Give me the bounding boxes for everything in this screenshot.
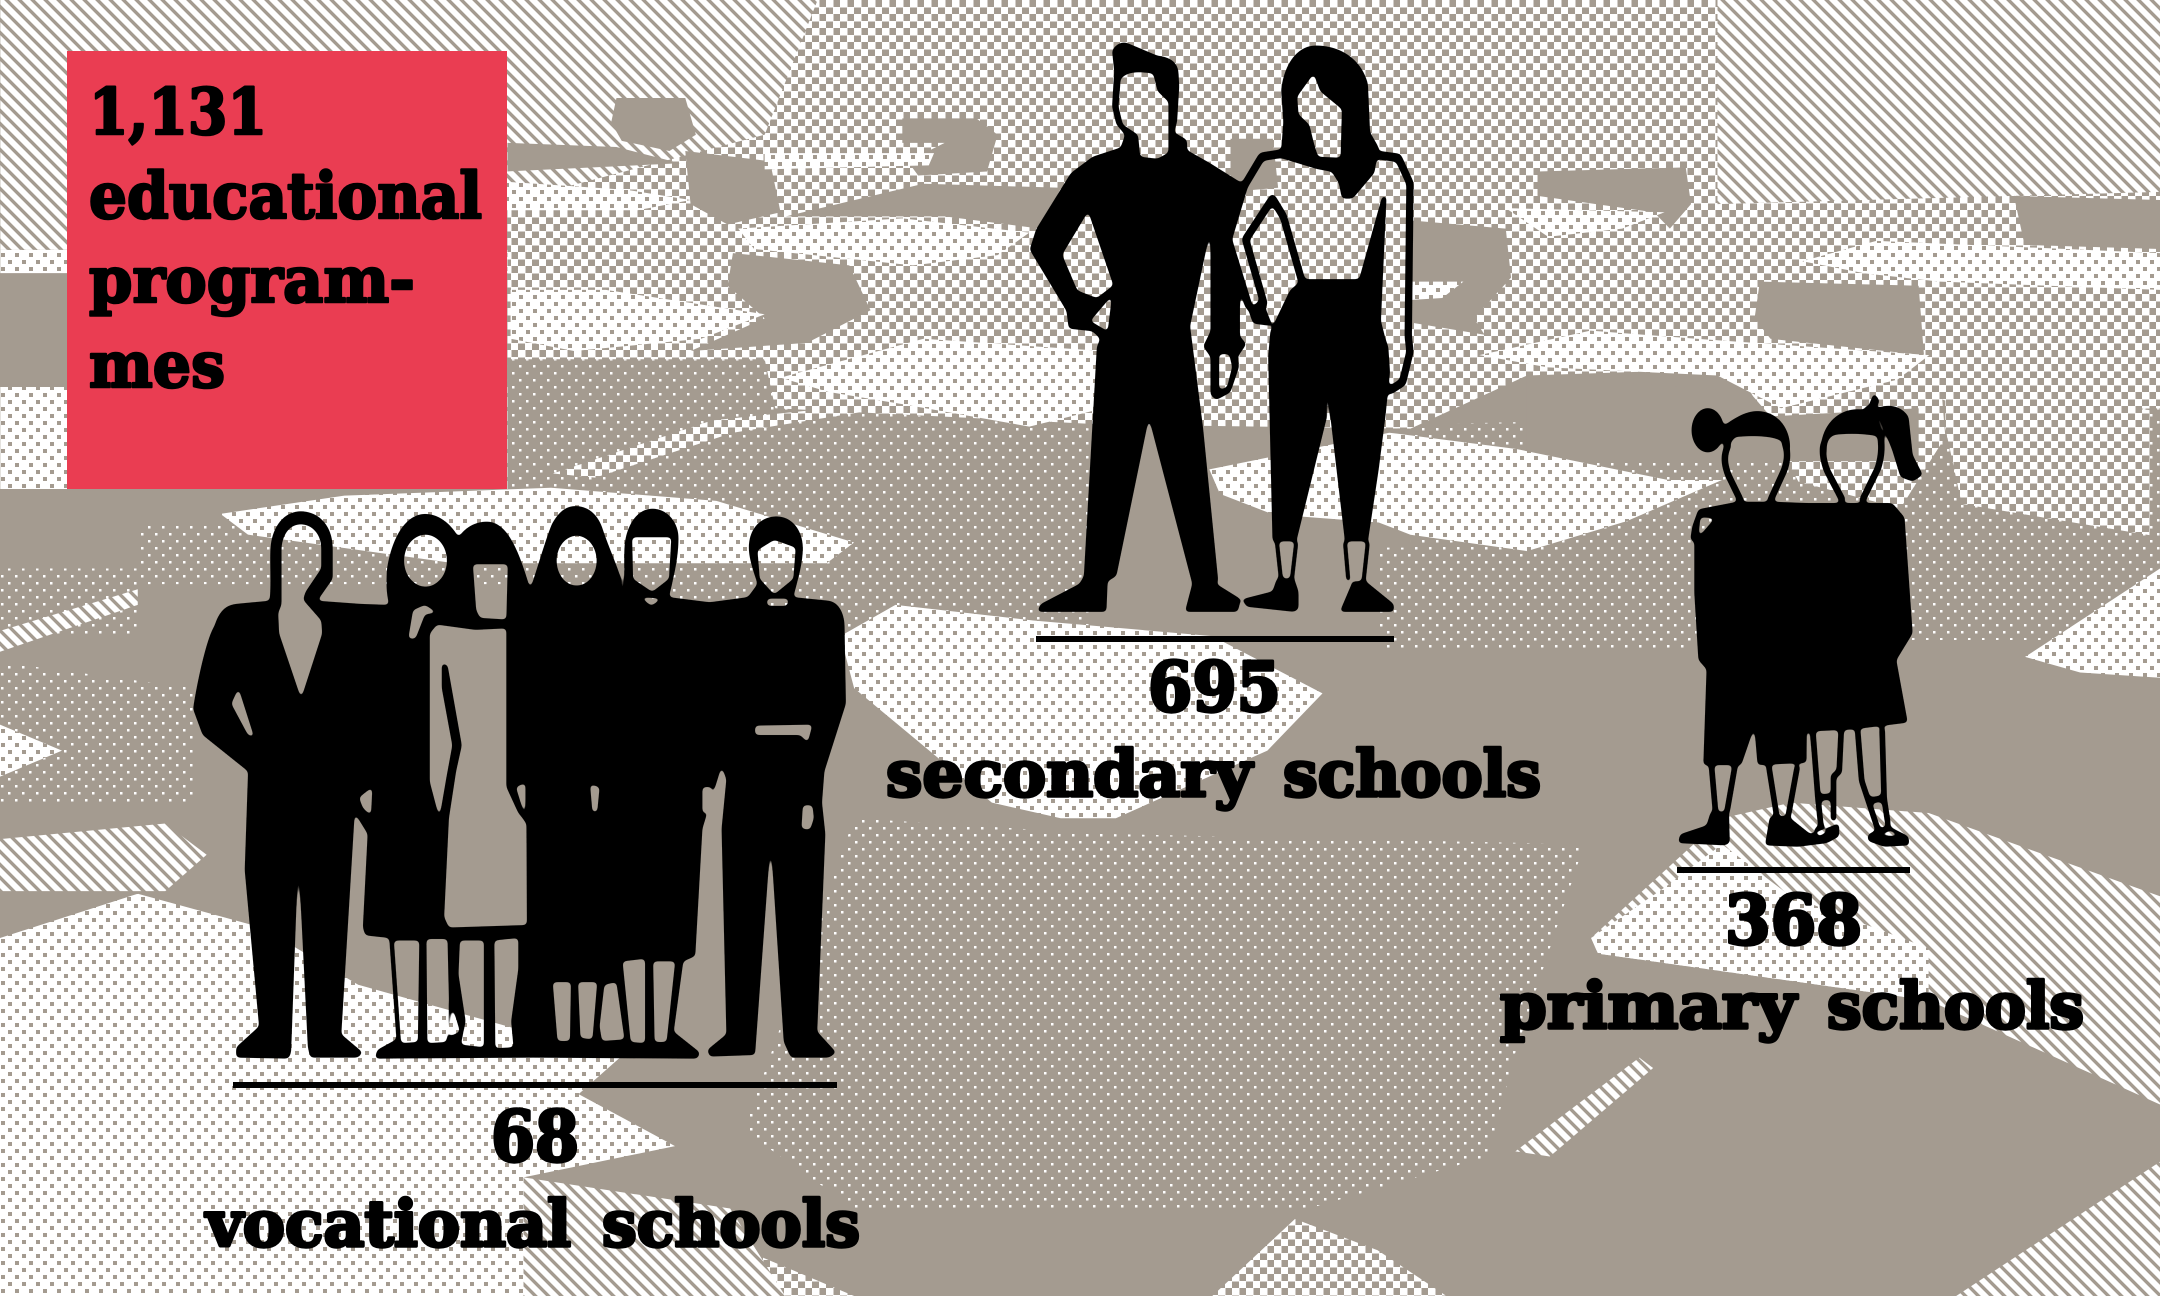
children legs and shoes <box>1678 727 1909 847</box>
child one head <box>1691 408 1790 502</box>
label: 695 secondary schools: 695 <box>1148 648 1281 728</box>
label: 368 primary schools <box>1500 881 2084 1044</box>
child two head <box>1821 392 1923 502</box>
headline: 1,131 educational programmes: program- <box>89 243 415 318</box>
icon: two secondary school students <box>1030 42 1410 612</box>
headline: 1,131 educational programmes: 1,131 <box>89 75 267 150</box>
divider line: secondary <box>1036 636 1394 642</box>
man figure <box>1030 42 1246 612</box>
divider line: vocational <box>233 1082 837 1088</box>
icon: group of six vocational school students <box>193 506 846 1059</box>
label: 368 primary schools: schools <box>1827 969 2084 1044</box>
label: 368 primary schools: 368 <box>1725 881 1862 961</box>
label: 368 primary schools: primary <box>1500 969 1798 1044</box>
label: 68 vocational schools <box>204 1095 860 1262</box>
headline: 1,131 educational programmes: educational <box>89 159 482 234</box>
label: 68 vocational schools: vocational <box>204 1187 571 1262</box>
label: 695 secondary schools: secondary <box>886 737 1254 812</box>
label: 68 vocational schools: 68 <box>491 1095 579 1178</box>
panel: red headline box <box>67 51 507 489</box>
label: 68 vocational schools: schools <box>602 1187 860 1262</box>
headline: 1,131 educational programmes: mes <box>89 328 225 403</box>
woman figure <box>1228 46 1410 612</box>
icon: two primary school children <box>1678 392 1923 847</box>
children bodies <box>1690 502 1913 765</box>
label: 695 secondary schools <box>886 648 1541 812</box>
headline: 1,131 educational programmes <box>89 75 482 403</box>
label: 695 secondary schools: schools <box>1283 737 1541 812</box>
divider line: primary <box>1677 867 1910 873</box>
